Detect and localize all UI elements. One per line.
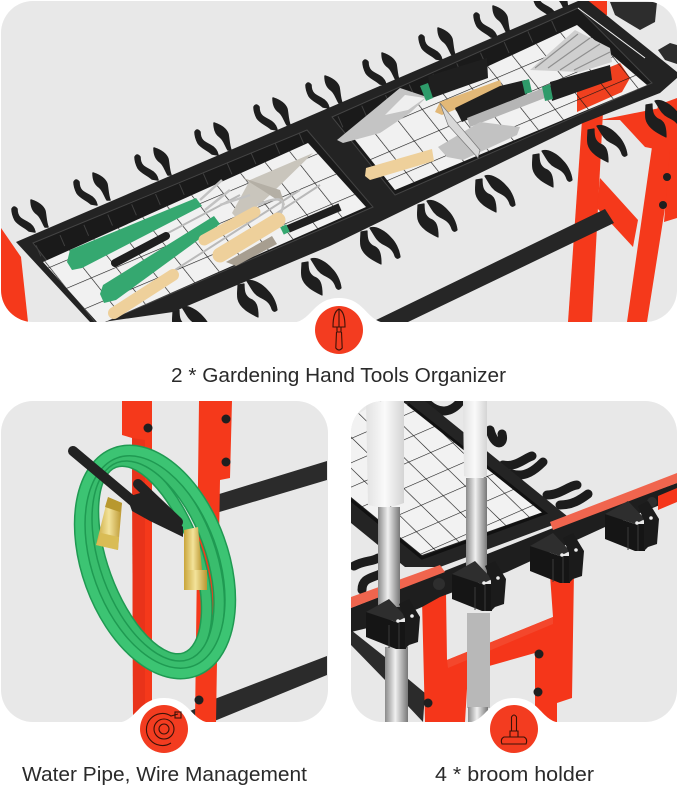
red top strips <box>351 473 677 608</box>
brass connector right <box>184 527 207 590</box>
broom holder clips <box>366 501 659 649</box>
tools in left basket <box>67 153 340 313</box>
caption: broom holder: 4 * broom holder <box>435 764 594 786</box>
panel: water pipe and wire management <box>1 401 328 722</box>
bolts <box>424 650 544 708</box>
red beam ends <box>658 488 677 510</box>
broom pole one <box>366 401 408 723</box>
bolts <box>144 414 230 704</box>
icon: broom <box>490 705 538 753</box>
basket mesh floor <box>351 401 545 558</box>
tools in right basket <box>337 30 612 180</box>
left wire basket <box>33 130 373 322</box>
red legs and cross bar <box>422 572 574 722</box>
panel: broom holder <box>351 401 677 723</box>
upper hook row <box>12 0 569 232</box>
brass connector left <box>96 497 122 550</box>
basket frame <box>351 401 567 567</box>
caption: gardening tools: 2 * Gardening Hand Tools Organizer <box>171 365 506 387</box>
icon: hose reel <box>140 705 188 753</box>
red posts <box>122 401 232 722</box>
red rack legs <box>1 1 677 322</box>
icon notch: left panel <box>115 698 213 723</box>
black side hooks <box>354 402 588 590</box>
icon notch: right panel <box>465 698 563 723</box>
lower hook row <box>173 101 679 343</box>
black cross bars <box>190 461 327 722</box>
panel: gardening hand tools organizer <box>1 0 679 343</box>
black shelf frame <box>16 0 677 322</box>
beam bolts <box>433 497 657 590</box>
broom pole two <box>463 401 490 723</box>
black hose hook <box>73 451 183 537</box>
icon notch: top panel <box>290 298 388 323</box>
lower crossbar <box>372 209 614 322</box>
dark holders at top right <box>610 2 677 64</box>
right wire basket <box>332 8 652 195</box>
icon: trowel <box>315 306 363 354</box>
hose coils <box>74 444 236 680</box>
lower black braces <box>351 630 425 722</box>
caption: water pipe: Water Pipe, Wire Management <box>22 764 307 786</box>
leg bolts <box>659 173 671 209</box>
black beam <box>351 483 677 632</box>
